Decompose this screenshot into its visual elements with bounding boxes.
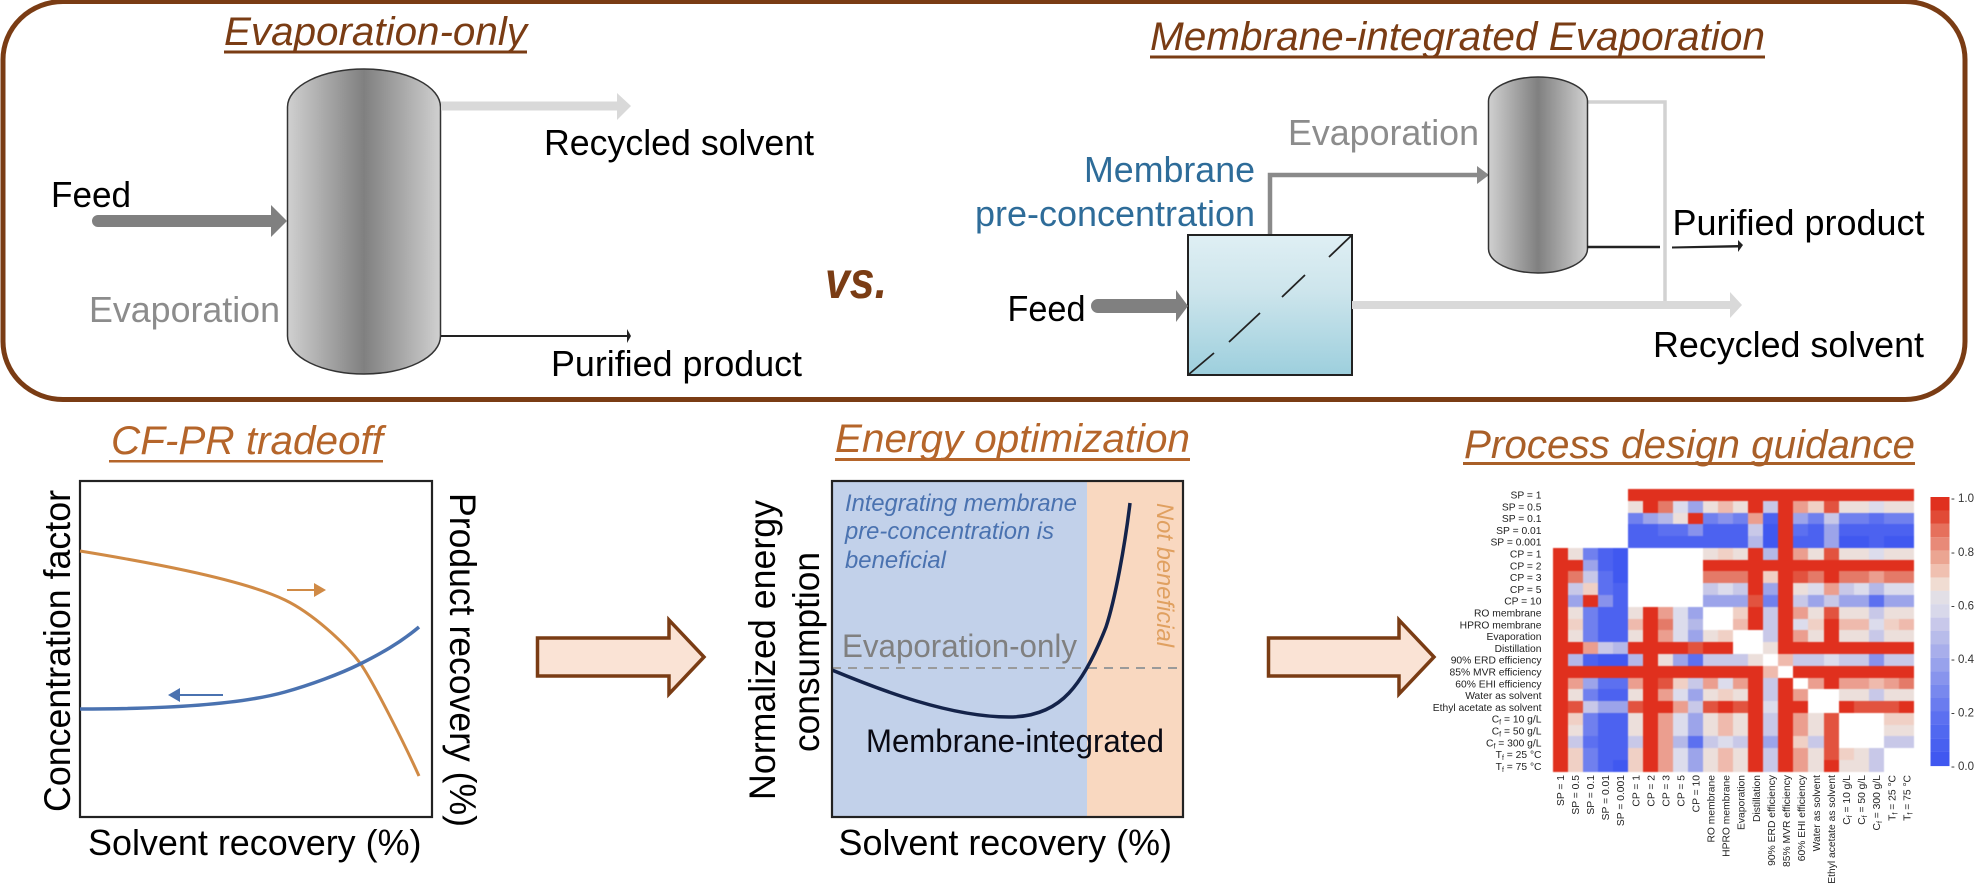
column labels: RO membrane (1707, 775, 1718, 843)
row labels: Evaporation (1487, 632, 1542, 643)
row labels: 90% ERD efficiency (1451, 656, 1542, 667)
colorbar tick labels: - 0.2 (1951, 708, 1974, 720)
row labels: f (1502, 767, 1504, 774)
column labels: f (1847, 815, 1854, 817)
colorbar tick labels: - 0.4 (1951, 654, 1974, 666)
panel: energy optimization (742, 417, 1190, 863)
column labels: SP = 0.01 (1601, 775, 1612, 820)
label: x axis: Solvent recovery (%) (838, 822, 1172, 863)
arrow: purified product (1587, 240, 1743, 252)
column labels: SP = 0.001 (1616, 775, 1627, 826)
colorbar tick labels: - 0.8 (1951, 547, 1974, 559)
arrow: orange right (287, 583, 326, 597)
heading: CF-PR tradeoff: CF-PR tradeoff (111, 419, 387, 463)
row labels: f (1499, 720, 1501, 727)
label: membrane pre-concentration: Membrane (1084, 149, 1255, 190)
region: not beneficial (1087, 481, 1183, 817)
column labels: = 50 g/L (1857, 775, 1868, 815)
panel: evaporation-only (51, 10, 814, 384)
row labels: C (1492, 715, 1499, 726)
row labels: = 300 g/L (1495, 738, 1542, 749)
row labels: = 25 °C (1504, 750, 1542, 761)
column labels: C (1842, 817, 1853, 825)
column labels: f (1892, 813, 1899, 815)
heading: process design guidance: Process design guidance (1464, 423, 1915, 467)
label: evaporation-only: Evaporation-only (842, 628, 1077, 664)
label: y axis right: Product recovery (%) (442, 493, 483, 827)
label: vs.: vs. (825, 252, 887, 310)
row labels: SP = 0.001 (1490, 538, 1542, 549)
column labels: SP = 1 (1556, 775, 1567, 806)
column labels: Ethyl acetate as solvent (1827, 775, 1838, 884)
row labels: CP = 10 (1504, 597, 1542, 608)
panel: process comparison frame (3, 2, 1965, 400)
label: y axis (742, 500, 827, 800)
label: beneficial region: beneficial (845, 547, 947, 574)
label: beneficial region: Integrating membrane (845, 490, 1077, 517)
row labels: 85% MVR efficiency (1450, 668, 1542, 678)
colorbar tick labels: - 0.0 (1951, 761, 1974, 773)
icon: membrane module (1188, 235, 1352, 375)
chart: CF-PR axes (80, 481, 432, 817)
label: beneficial region (844, 490, 1077, 574)
column labels: = 75 °C (1902, 774, 1913, 813)
row labels: f (1499, 732, 1501, 738)
column labels: CP = 2 (1646, 775, 1657, 807)
row labels: 60% EHI efficiency (1455, 679, 1542, 690)
chart frame (832, 481, 1183, 817)
arrow: recycled solvent (441, 93, 631, 120)
line: evaporation-only baseline (832, 667, 1183, 669)
column labels (1556, 774, 1914, 884)
column labels: C (1857, 817, 1868, 825)
heading: energy optimization: Energy optimization (835, 417, 1190, 461)
row labels: = 50 g/L (1501, 726, 1542, 738)
panel: membrane-integrated evaporation (975, 15, 1924, 375)
panel: process design guidance (1433, 423, 1974, 884)
column labels: C (1872, 823, 1883, 830)
column labels: f (1862, 815, 1869, 817)
label: beneficial region: pre-concentration is (844, 518, 1054, 545)
icon: evaporator vessel (288, 69, 440, 374)
column labels: Distillation (1752, 775, 1763, 822)
row labels: f (1493, 743, 1495, 750)
row labels: Water as solvent (1465, 691, 1542, 702)
column labels: CP = 5 (1676, 775, 1688, 807)
label: membrane pre-concentration: pre-concentration (975, 193, 1255, 234)
arrow: purified product (441, 329, 631, 343)
row labels: C (1486, 738, 1493, 749)
colorbar tick labels: - 0.6 (1951, 600, 1974, 612)
column labels: CP = 3 (1661, 775, 1672, 807)
arrow: feed (92, 205, 287, 237)
column labels: = 300 g/L (1872, 775, 1883, 821)
column labels: T (1887, 815, 1898, 821)
row labels: = 10 g/L (1501, 715, 1542, 726)
column labels: CP = 1 (1631, 775, 1642, 807)
arrow: tradeoff to energy (538, 620, 704, 694)
column labels: Water as solvent (1812, 775, 1823, 851)
column labels: SP = 0.1 (1586, 775, 1597, 815)
row labels: HPRO membrane (1460, 620, 1542, 631)
panel: CF-PR tradeoff (37, 419, 483, 863)
heading: evaporation-only: Evaporation-only (224, 10, 530, 54)
label: feed: Feed (1008, 288, 1086, 329)
label: recycled solvent: Recycled solvent (544, 122, 814, 163)
label: y axis left: Concentration factor (37, 490, 78, 812)
column labels: SP = 0.5 (1571, 775, 1582, 815)
arrow: recycled solvent (1352, 292, 1742, 318)
row labels: = 75 °C (1504, 762, 1542, 773)
column labels: Evaporation (1737, 775, 1748, 830)
row labels: T (1496, 762, 1502, 773)
row labels: CP = 5 (1510, 585, 1542, 596)
label: purified product: Purified product (551, 343, 802, 384)
row labels: f (1502, 755, 1504, 762)
arrow: blue left (168, 688, 223, 702)
row labels: C (1492, 726, 1499, 738)
label: y axis: Normalized energy (742, 500, 783, 800)
column labels: 85% MVR efficiency (1782, 774, 1793, 867)
colorbar tick labels: - 1.0 (1951, 493, 1974, 505)
column labels: T (1902, 815, 1913, 821)
arrow: membrane concentrate to evaporator (1270, 175, 1478, 235)
curve: membrane-integrated energy (832, 503, 1130, 717)
column labels: 90% ERD efficiency (1767, 774, 1778, 866)
row labels: RO membrane (1474, 608, 1542, 620)
row labels: CP = 2 (1510, 561, 1542, 572)
column labels: CP = 10 (1692, 775, 1702, 812)
heatmap labels and colorbar (1433, 423, 1974, 884)
row labels: CP = 3 (1510, 573, 1542, 584)
label: y axis: consumption (786, 552, 827, 752)
row labels: CP = 1 (1510, 550, 1542, 560)
column labels: f (1907, 813, 1914, 815)
label: evaporation: Evaporation (1288, 112, 1479, 153)
arrowhead: concentrate (1477, 166, 1489, 184)
curve: concentration factor (80, 627, 419, 709)
row labels: SP = 0.5 (1502, 502, 1542, 513)
label: membrane pre-concentration (975, 149, 1255, 234)
heading: membrane-integrated evaporation: Membrane-integrated Evaporation (1150, 15, 1765, 59)
row labels: Ethyl acetate as solvent (1433, 703, 1542, 714)
label: feed: Feed (51, 174, 131, 215)
label: not beneficial: Not beneficial (1151, 503, 1178, 648)
label: x axis: Solvent recovery (%) (88, 822, 422, 863)
row labels: SP = 0.1 (1502, 514, 1542, 525)
line: evaporation vapor to recycle (1587, 102, 1665, 305)
label: membrane-integrated: Membrane-integrated (866, 723, 1164, 759)
arrow: energy to guidance (1268, 620, 1434, 694)
row labels (1433, 490, 1542, 774)
row labels: T (1496, 750, 1502, 761)
colorbar tick labels (1951, 493, 1974, 773)
column labels: HPRO membrane (1722, 775, 1733, 857)
column labels: = 10 g/L (1842, 775, 1853, 815)
label: purified product: Purified product (1672, 202, 1924, 243)
column labels: f (1877, 821, 1884, 823)
icon: small evaporator vessel (1488, 77, 1588, 273)
label: evaporation: Evaporation (89, 289, 280, 330)
row labels: SP = 0.01 (1496, 526, 1542, 537)
arrow: feed (1091, 290, 1188, 322)
label: recycled solvent: Recycled solvent (1653, 324, 1924, 365)
column labels: = 25 °C (1887, 774, 1898, 813)
row labels: SP = 1 (1510, 490, 1542, 502)
heatmap cells (1552, 488, 1915, 773)
row labels: Distillation (1495, 644, 1542, 655)
column labels: 60% EHI efficiency (1797, 774, 1808, 861)
curve: product recovery (80, 551, 419, 776)
colorbar (1930, 497, 1950, 766)
region: beneficial (832, 481, 1087, 817)
